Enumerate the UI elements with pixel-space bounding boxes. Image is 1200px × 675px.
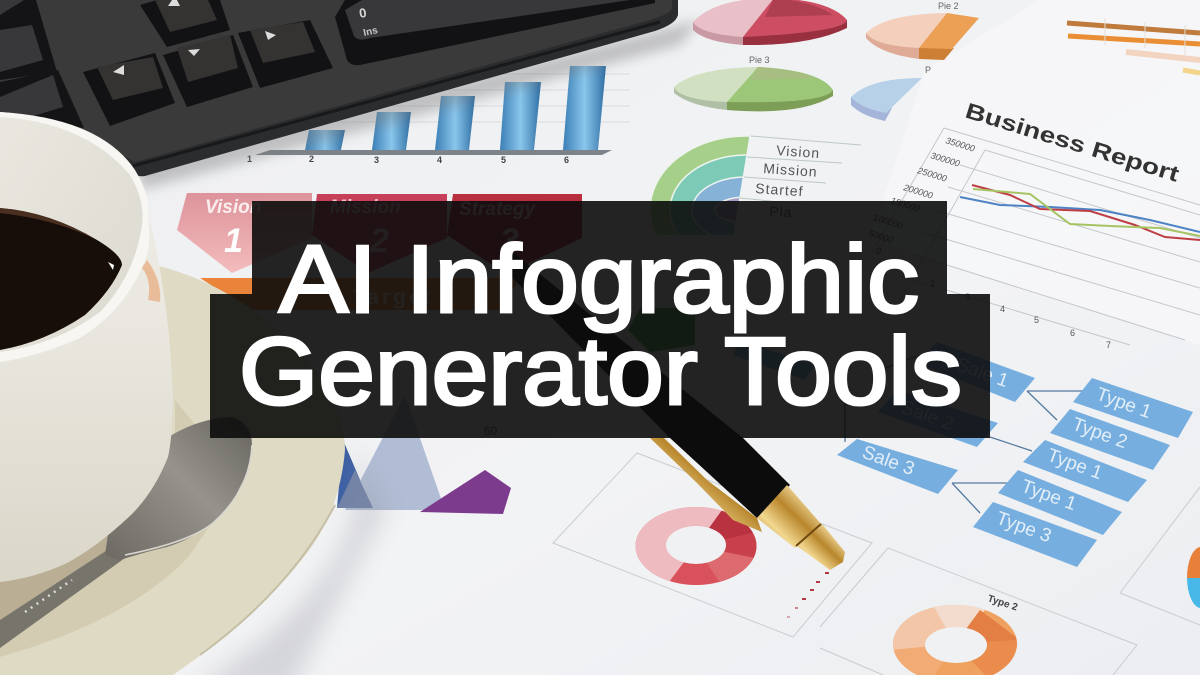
- bar chart: 4: [437, 155, 442, 165]
- vision mission strategy banners: Vision: [205, 197, 261, 218]
- coffee cup: [0, 112, 173, 582]
- donut chart red: [553, 453, 872, 637]
- business report line chart: 0: [876, 246, 881, 256]
- bar chart: 3: [374, 155, 379, 165]
- vision mission strategy banners: 3: [500, 222, 519, 260]
- sale and type flowchart: Type 1: [1018, 476, 1079, 515]
- sale and type flowchart: [837, 342, 1193, 567]
- business report line chart: 300000: [929, 150, 961, 169]
- left keys: [0, 0, 84, 128]
- sale and type flowchart: Sale 2: [898, 397, 956, 435]
- pie P: [851, 65, 931, 121]
- bar chart: 2: [309, 154, 314, 164]
- sale and type flowchart: Sale 3: [859, 442, 917, 480]
- sale and type flowchart: Type 1: [1093, 384, 1154, 423]
- sale and type flowchart: Type 3: [993, 508, 1054, 547]
- green bulb icon: [628, 308, 695, 352]
- zero key: [335, 0, 655, 65]
- title: Generator Tools: [239, 318, 962, 425]
- zero key: 0: [358, 5, 368, 21]
- business report line chart: 250000: [915, 165, 948, 184]
- sale and type flowchart: Type 2: [1069, 414, 1130, 453]
- business report line chart: 200000: [901, 182, 934, 201]
- bar chart: 6: [564, 155, 569, 165]
- vision mission strategy banners: [177, 193, 582, 310]
- triangle chart: 60: [484, 424, 498, 438]
- business report line chart: 6: [1070, 328, 1075, 338]
- pie 1: [693, 0, 847, 45]
- arrow up key: [140, 0, 230, 47]
- pie 3: Pie 3: [749, 55, 770, 65]
- bar chart: [247, 66, 630, 165]
- sale and type flowchart: Sale 1: [953, 354, 1011, 392]
- keyboard shadow: [140, 20, 700, 190]
- spoon: [0, 417, 252, 648]
- pie 2: [866, 1, 979, 60]
- vision mission strategy banners: 2: [369, 222, 389, 260]
- business report line chart: [850, 98, 1200, 350]
- business report line chart: 5: [1034, 315, 1039, 325]
- partial pie chart right edge: [1120, 487, 1200, 625]
- title: [239, 226, 962, 425]
- bar chart: 1: [247, 154, 252, 164]
- business report line chart: 350000: [944, 135, 976, 154]
- concentric chart: vision, mission: Startef: [755, 180, 804, 199]
- keyboard: [0, 0, 678, 176]
- triangle chart: [337, 395, 511, 514]
- business report line chart: 50000: [867, 228, 894, 245]
- business report line chart: 100000: [872, 212, 904, 231]
- concentric chart: vision, mission: [651, 136, 861, 235]
- pie 2: Pie 2: [938, 1, 959, 11]
- title background boxes: [210, 201, 990, 438]
- pie 3: [674, 55, 833, 111]
- business report line chart: Business Report: [963, 98, 1183, 187]
- arrow down key: [163, 35, 253, 107]
- donut chart orange: [820, 548, 1137, 675]
- vision mission strategy banners: Strategy: [459, 199, 536, 220]
- title: AI Infographic: [279, 226, 919, 333]
- business report line chart: 150000: [889, 195, 921, 214]
- vision mission strategy banners: Target: [353, 286, 434, 309]
- business report line chart: 3: [965, 292, 970, 302]
- arrow right key: [238, 20, 333, 88]
- pie P: P: [925, 65, 931, 75]
- orange bar chart top right: [1067, 18, 1200, 73]
- concentric chart: vision, mission: Vision: [776, 142, 821, 161]
- business report line chart: 4: [1000, 304, 1005, 314]
- concentric chart: vision, mission: Pla: [769, 203, 793, 221]
- business report line chart: 2: [930, 279, 935, 289]
- sale and type flowchart: Type 1: [1044, 445, 1105, 484]
- vision mission strategy banners: Mission: [330, 197, 401, 218]
- pen: [500, 250, 845, 570]
- vision mission strategy banners: 1: [224, 222, 243, 260]
- trend box: [733, 340, 815, 380]
- business report line chart: 7: [1106, 340, 1111, 350]
- arrow left key: [83, 53, 175, 126]
- bar chart: 5: [501, 155, 506, 165]
- concentric chart: vision, mission: Mission: [763, 160, 818, 180]
- zero key: Ins: [362, 25, 379, 39]
- donut chart orange: Type 2: [986, 593, 1019, 614]
- saucer: [0, 264, 345, 675]
- saucer shadow: [190, 440, 385, 675]
